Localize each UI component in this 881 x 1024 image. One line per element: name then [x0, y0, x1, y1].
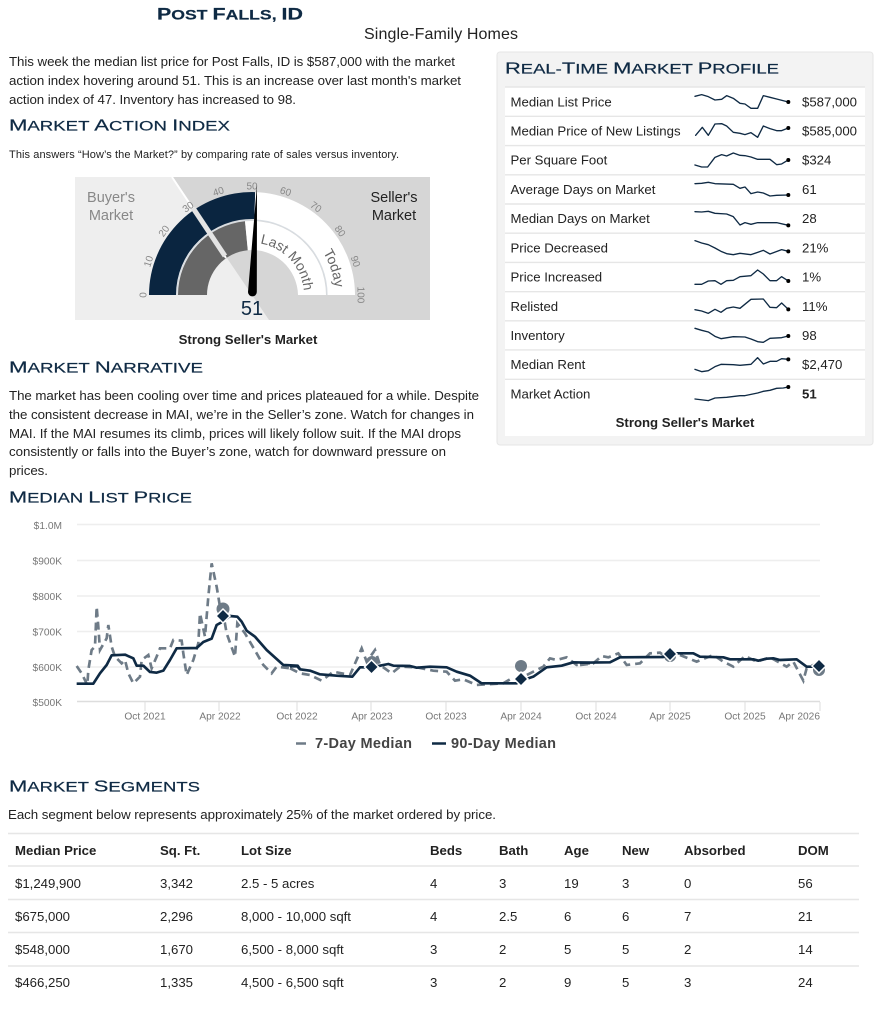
chart legend: 90-Day Median [451, 736, 556, 752]
row: median days on market [510, 211, 817, 227]
series: 7-day median [77, 563, 819, 685]
gauge scale numbers: 80 [332, 224, 347, 240]
panel: real-time market profile [497, 52, 873, 445]
row: per square foot: Per Square Foot [510, 153, 608, 168]
row: relisted: Relisted [510, 299, 558, 314]
table row 3 [15, 942, 813, 957]
title: POST FALLS, ID [157, 4, 303, 24]
table header: DOM [798, 843, 829, 858]
intro text block: action index hovering around 51. This is an increase over last month's market [9, 73, 461, 88]
table row 3: 2 [499, 942, 506, 957]
narrative text block: the consistent decrease in MAI, we’re in the Seller’s zone. Watch for changes in [9, 407, 474, 422]
table row 2: 21 [798, 909, 813, 924]
table row 3: 6,500 - 8,000 sqft [241, 942, 344, 957]
row: price increased: Price Increased [510, 270, 602, 285]
table row 4: 4,500 - 6,500 sqft [241, 975, 344, 990]
narrative text block: consistently or falls into the Buyer’s zone, watch for downward pressure on [9, 444, 446, 459]
table header: Median Price [15, 843, 96, 858]
row: median rent: Median Rent [510, 357, 586, 372]
heading: Market Action Index: M ARKET A CTION INDEX [9, 118, 230, 134]
chart legend [296, 736, 556, 752]
y axis grid and labels: $600K [33, 663, 62, 674]
y axis grid and labels: $900K [33, 556, 62, 568]
row: median days on market: 28 [802, 211, 817, 226]
x axis ticks and labels: Oct 2021 [124, 712, 166, 722]
row: median list price [510, 94, 857, 110]
table row 4: $466,250 [15, 975, 70, 990]
table row 3: 5 [564, 942, 571, 957]
table row 1: 3,342 [160, 876, 193, 891]
gauge scale numbers: 20 [157, 223, 173, 239]
gauge scale numbers: 60 [278, 185, 293, 199]
table row 4: 1,335 [160, 975, 193, 990]
row: price increased [510, 270, 821, 285]
sparkline: median days [695, 211, 790, 227]
table row 2 [15, 909, 813, 924]
narrative text block: The market has been cooling over time and prices plateaued for a while. Despite [9, 388, 479, 403]
gauge scale numbers: 50 [246, 182, 258, 192]
y axis grid and labels [33, 521, 820, 709]
narrative text block [9, 388, 479, 478]
panel caption: Strong Seller's Market [616, 415, 755, 430]
table row 1 [15, 876, 813, 891]
table row 2: $675,000 [15, 909, 70, 924]
row: market action: Market Action [510, 386, 590, 402]
heading: Market Narrative: M ARKET N ARRATIVE [9, 360, 203, 376]
row: price increased: 1% [802, 270, 821, 285]
x axis ticks and labels: Oct 2023 [425, 712, 467, 722]
row: price decreased: Price Decreased [510, 240, 608, 256]
label: seller's market: Seller's [370, 190, 418, 206]
table row 4: 9 [564, 975, 571, 990]
label: last month: Last Month [261, 234, 314, 290]
row: median price of new listings: $585,000 [802, 124, 857, 138]
gauge needle [248, 185, 257, 296]
table row 3: 5 [622, 942, 629, 957]
sparkline: relisted [695, 299, 790, 313]
markers: 7-day median [216, 602, 825, 676]
intro text block [9, 54, 461, 107]
table row 2: 6 [622, 909, 629, 924]
gauge scale numbers: 0 [138, 292, 150, 298]
line chart: median list price [33, 521, 826, 752]
table header: Sq. Ft. [160, 843, 200, 858]
y axis grid and labels: $800K [33, 592, 62, 603]
table row 2: 4 [430, 909, 437, 924]
table header: Age [564, 843, 589, 858]
x axis ticks and labels: Apr 2022 [199, 712, 241, 722]
table row 1: 0 [684, 876, 691, 891]
row: median days on market: Median Days on Market [510, 211, 650, 226]
row: relisted: 11% [802, 299, 828, 314]
y axis grid and labels: $700K [33, 628, 62, 638]
row: median list price: $587,000 [802, 94, 857, 110]
x axis ticks and labels: Oct 2022 [276, 712, 318, 722]
intro text block: This week the median list price for Post Falls, ID is $587,000 with the market [9, 54, 455, 69]
gauge scale numbers [138, 182, 366, 304]
row: inventory: 98 [802, 328, 817, 343]
table row 1: $1,249,900 [15, 876, 81, 891]
sparkline: inventory [695, 328, 790, 342]
row: median price of new listings: Median Price of New Listings [510, 124, 681, 138]
table row 3: $548,000 [15, 942, 70, 957]
table row 4: 5 [622, 975, 629, 990]
markers: 90-day median [216, 609, 826, 686]
x axis ticks and labels [124, 702, 820, 722]
row: relisted [510, 299, 828, 314]
gauge scale numbers: 100 [354, 287, 366, 304]
table header [15, 843, 829, 858]
row: average days on market: 61 [802, 182, 817, 197]
table row 2: 6 [564, 909, 571, 924]
sparkline: average days [695, 182, 790, 197]
x axis ticks and labels: Apr 2026 [779, 712, 820, 722]
sparkline: median rent [695, 357, 790, 372]
table row 2: 2.5 [499, 909, 517, 924]
market action description: This answers “How’s the Market?” by comparing rate of sales versus inventory. [9, 149, 399, 161]
chart legend: 7-Day Median [315, 736, 412, 752]
gauge value: 51 [241, 298, 263, 320]
panel heading: R EAL- T IME M ARKET P ROFILE [505, 60, 779, 78]
row: market action: 51 [802, 386, 817, 402]
row: average days on market: Average Days on Market [510, 182, 656, 197]
heading: Median List Price: M EDIAN LIST P RICE [9, 490, 192, 506]
row: median price of new listings [510, 124, 857, 138]
table row 3: 2 [684, 942, 691, 957]
table row 1: 3 [499, 876, 506, 891]
label: seller's market: Market [372, 208, 416, 224]
table header: Lot Size [241, 843, 292, 858]
row: per square foot: $324 [802, 153, 831, 168]
segments description: Each segment below represents approximately 25% of the market ordered by price. [8, 807, 496, 822]
gauge scale numbers: 90 [348, 255, 362, 269]
row: market action [510, 385, 817, 402]
table row 1: 3 [622, 876, 629, 891]
gauge scale numbers: 70 [308, 200, 324, 216]
table row 3: 14 [798, 942, 813, 957]
table header: Beds [430, 843, 462, 858]
table header: New [622, 843, 650, 858]
table row 4: 3 [430, 975, 437, 990]
row: price decreased: 21% [802, 240, 829, 256]
table row 1: 4 [430, 876, 437, 891]
white remainder of last month arc [245, 221, 326, 295]
sparkline: new listings [696, 124, 790, 137]
table row 4 [15, 975, 813, 990]
table row 4: 24 [798, 975, 813, 990]
table header: Absorbed [684, 843, 746, 858]
sparkline: price decreased [695, 241, 790, 255]
x axis ticks and labels: Oct 2024 [575, 712, 617, 722]
row: median rent: $2,470 [802, 357, 842, 372]
table row 3: 3 [430, 942, 437, 957]
table header: Bath [499, 843, 528, 858]
gauge scale numbers: 30 [181, 200, 197, 215]
series: 90-day median [77, 616, 819, 684]
table: market segments [8, 834, 859, 990]
x axis ticks and labels: Oct 2025 [724, 712, 766, 722]
gauge scale numbers: 40 [212, 185, 226, 199]
row: per square foot [510, 153, 831, 168]
white remainder of today arc [254, 192, 355, 295]
gauge caption: Strong Seller's Market [179, 332, 318, 347]
x axis ticks and labels: Apr 2024 [500, 712, 542, 722]
row: median rent [510, 357, 842, 372]
last month arc: market action 47 [178, 221, 248, 295]
subtitle: Single-Family Homes [364, 26, 518, 43]
table row 1: 2.5 - 5 acres [241, 876, 315, 891]
table row 2: 2,296 [160, 909, 193, 924]
gauge scale numbers: 10 [142, 254, 156, 269]
gauge: market action index [75, 177, 430, 320]
sparkline: market action [695, 385, 790, 401]
today arc: market action 51 [149, 192, 255, 295]
y axis grid and labels: $1.0M [34, 521, 62, 532]
heading: Market Segments: M ARKET S EGMENTS [9, 778, 200, 796]
table row 4: 2 [499, 975, 506, 990]
table row 1: 19 [564, 876, 579, 891]
narrative text block: MAI. If the MAI resumes its climb, prices will likely follow suit. If the MAI drops [9, 426, 461, 441]
row: price decreased [510, 240, 829, 256]
table row 4: 3 [684, 975, 691, 990]
sparkline: per square foot [695, 153, 790, 167]
table row 2: 8,000 - 10,000 sqft [241, 909, 351, 924]
x axis ticks and labels: Apr 2025 [649, 712, 691, 722]
row: inventory: Inventory [510, 328, 565, 343]
intro text block: action index of 47. Inventory has increased to 98. [9, 92, 296, 107]
label: buyer's market: Market [89, 208, 133, 224]
table row 2: 7 [684, 909, 691, 924]
y axis grid and labels: $500K [33, 698, 62, 709]
table row 1: 56 [798, 876, 813, 891]
row: median list price: Median List Price [510, 94, 612, 110]
table row 3: 1,670 [160, 942, 193, 957]
row: inventory [510, 328, 817, 343]
narrative text block: prices. [9, 463, 48, 478]
sparkline: median list price [695, 95, 790, 108]
label: buyer's market: Buyer's [87, 190, 135, 206]
label: today: Today [324, 248, 342, 286]
x axis ticks and labels: Apr 2023 [351, 712, 393, 722]
row: average days on market [510, 182, 817, 197]
sparkline: price increased [695, 270, 790, 284]
